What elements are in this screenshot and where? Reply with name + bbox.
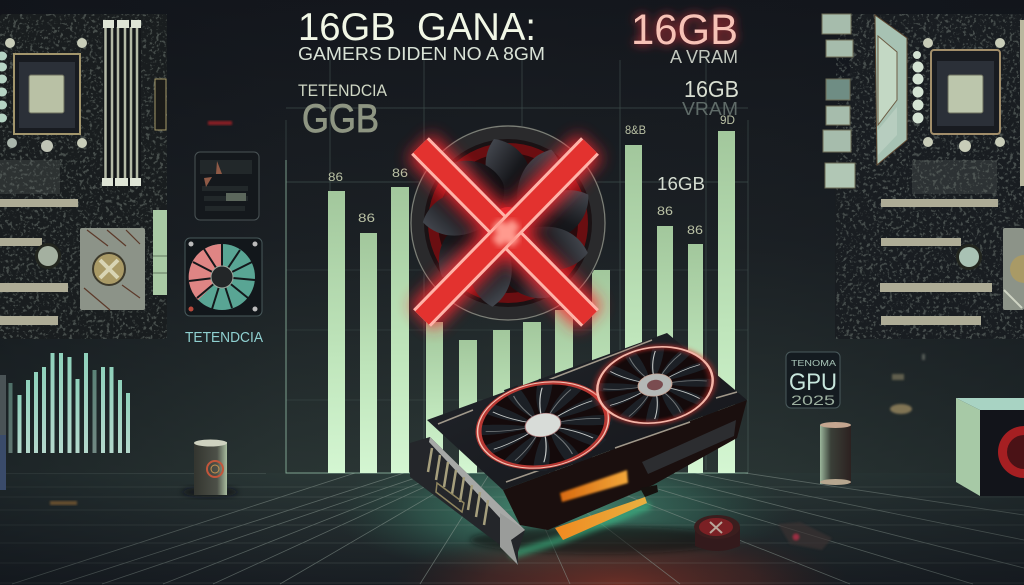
red smudge	[208, 121, 232, 125]
chart axis highlight	[286, 160, 748, 473]
floor smudge	[50, 501, 77, 505]
VRM dots and screws	[0, 38, 87, 152]
badge: tendencia GPU 2025: TENOMA	[791, 358, 836, 368]
bar value labels: 86	[392, 166, 408, 180]
angular heatsink	[875, 15, 907, 165]
top shroud	[427, 333, 747, 490]
shroud highlights	[438, 340, 737, 482]
expansion slots	[0, 199, 78, 325]
fan 1	[464, 367, 622, 483]
capacitor right	[956, 244, 982, 270]
icon: pastel fan	[185, 238, 262, 316]
bar value labels	[328, 113, 735, 237]
capacitor	[35, 243, 61, 269]
left edge object	[0, 375, 6, 490]
PCIe connector	[555, 497, 647, 540]
bar value labels: 86	[328, 170, 343, 184]
label: tetendcia: TETENDCIA	[298, 82, 387, 100]
PCB chip area	[0, 160, 60, 194]
label: GGB: GGB	[302, 97, 379, 141]
icon: red cross	[420, 146, 590, 318]
label: tetendcia small: TETENDCIA	[185, 330, 263, 346]
IO bracket	[410, 437, 525, 565]
heatsink	[80, 228, 145, 310]
panel: left motherboard	[0, 14, 167, 339]
spool right	[820, 422, 851, 485]
bar value labels: 8&B	[625, 123, 646, 137]
can left	[182, 440, 238, 497]
icon: small dashboard panel	[195, 152, 259, 220]
bracket port	[436, 483, 464, 512]
connector tab	[640, 485, 658, 497]
badge: tendencia GPU 2025: GPU	[789, 369, 837, 396]
CPU socket right	[923, 38, 1005, 152]
bracket bottom plate	[500, 513, 525, 565]
bar value labels: 9D	[720, 113, 735, 127]
floor with perspective tiles	[0, 473, 1024, 585]
power connector	[155, 79, 166, 130]
cube box right	[956, 398, 1024, 496]
title: 16GB GANA: 16GB GANA:	[298, 6, 536, 49]
orange light	[560, 470, 628, 502]
card glow	[510, 505, 650, 555]
label: 16GB chart: 16GB	[657, 174, 705, 194]
bar chart	[328, 131, 735, 473]
bracket vents	[428, 448, 488, 525]
silver bracket strip	[429, 437, 525, 534]
label: A VRAM: A VRAM	[670, 47, 738, 67]
fan 2	[592, 340, 718, 430]
dim floating specks	[890, 354, 925, 414]
label: VRAM dim: VRAM	[682, 99, 738, 119]
subtitle: GAMERS DIDEN NO A 8GM	[298, 43, 545, 64]
badge: tendencia GPU 2025	[786, 352, 840, 408]
small red cap	[694, 515, 740, 551]
green slot	[153, 210, 167, 295]
icon: large fan	[410, 125, 606, 321]
RAM slots	[102, 20, 141, 186]
heading: red 16GB: 16GB	[631, 6, 738, 54]
mini bar chart bottom-left	[8, 353, 130, 453]
heatsink right and RAM edge	[1003, 20, 1024, 310]
badge: tendencia GPU 2025: 2025	[791, 393, 835, 408]
chart frame	[286, 60, 748, 473]
small chip scatter on floor	[778, 522, 832, 550]
PCB chip area	[912, 160, 997, 194]
graphics card	[410, 333, 747, 565]
heading: red 16GB: 16GB	[631, 6, 738, 54]
bar value labels: 86	[657, 204, 673, 218]
CPU socket	[14, 54, 80, 134]
VRM dots	[912, 51, 924, 124]
label: 16GB right: 16GB	[684, 76, 739, 102]
vent mesh	[642, 420, 736, 474]
bar value labels: 86	[687, 223, 703, 237]
IO ports	[822, 14, 855, 188]
side face	[503, 400, 747, 530]
panel: right motherboard	[822, 14, 1024, 339]
bar value labels: 86	[358, 211, 375, 225]
GPU shadow	[470, 526, 730, 554]
expansion slots right	[880, 199, 998, 325]
